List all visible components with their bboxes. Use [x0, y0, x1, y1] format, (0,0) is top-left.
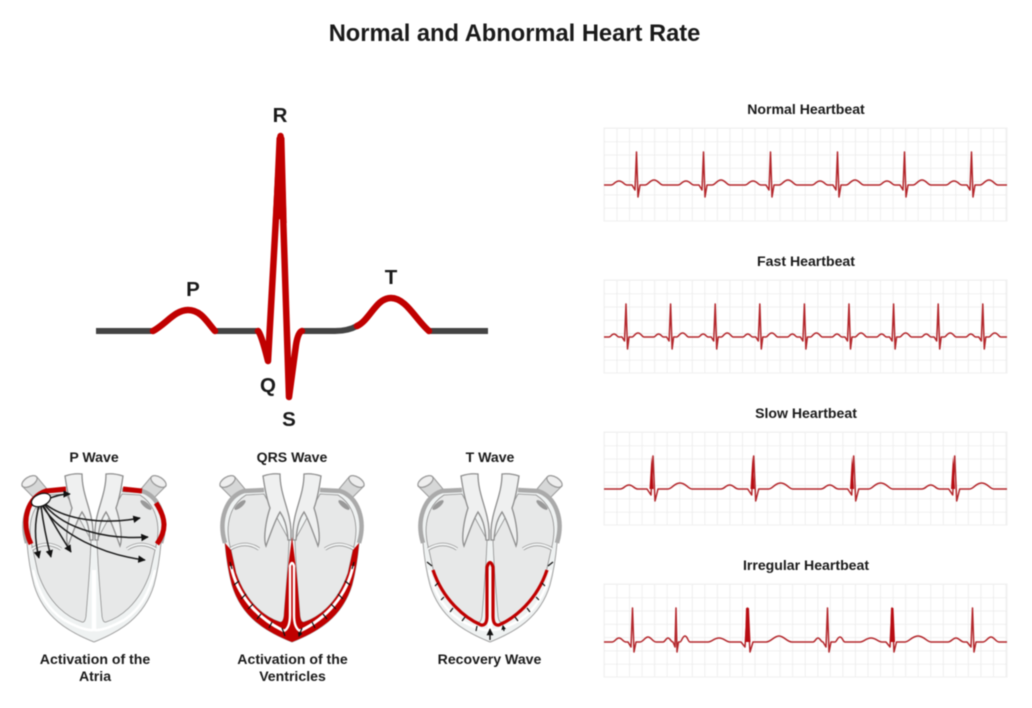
baseline segments [96, 326, 488, 331]
label T: T [385, 266, 398, 289]
panel: slow heartbeat strip [604, 405, 1007, 525]
caption: Activation of the [40, 651, 150, 667]
ECG grid [604, 432, 1007, 525]
panel: T wave heart [416, 449, 564, 667]
panel: irregular heartbeat strip [604, 557, 1007, 677]
heading: Fast Heartbeat [757, 253, 855, 269]
ECG trace [604, 608, 1007, 652]
heart diagram [20, 473, 168, 642]
PQRST red wave [153, 136, 429, 397]
heart diagram [218, 473, 366, 642]
heading: Irregular Heartbeat [743, 557, 869, 573]
recovery arrows [427, 562, 553, 640]
main ECG waveform [96, 104, 488, 431]
conduction arrows [36, 494, 148, 560]
ECG trace [604, 152, 1007, 197]
panel: P wave heart [20, 449, 168, 684]
ECG grid [604, 584, 1007, 677]
title: Normal and Abnormal Heart Rate [329, 21, 700, 47]
panel: QRS wave heart: Ventricles [259, 668, 326, 684]
heading: Normal Heartbeat [747, 101, 865, 117]
heading: QRS Wave [257, 449, 328, 465]
ECG grid [604, 280, 1007, 373]
panel: normal heartbeat strip [604, 101, 1007, 221]
label R: R [273, 104, 288, 127]
panel: fast heartbeat strip [604, 253, 1007, 373]
ECG trace [604, 304, 1007, 349]
caption: Recovery Wave [438, 651, 541, 667]
ECG trace [604, 456, 1007, 501]
ECG grid [604, 128, 1007, 221]
label Q: Q [260, 374, 276, 397]
heading: P Wave [69, 449, 119, 465]
panel: QRS wave heart [218, 449, 366, 684]
heart diagram [416, 473, 564, 642]
heading: T Wave [466, 449, 515, 465]
caption: Activation of the [237, 651, 348, 667]
heading: Slow Heartbeat [755, 405, 857, 421]
activation arrows [230, 562, 354, 636]
label S: S [282, 408, 296, 431]
label P: P [186, 278, 200, 301]
panel: P wave heart: Atria [79, 668, 111, 684]
